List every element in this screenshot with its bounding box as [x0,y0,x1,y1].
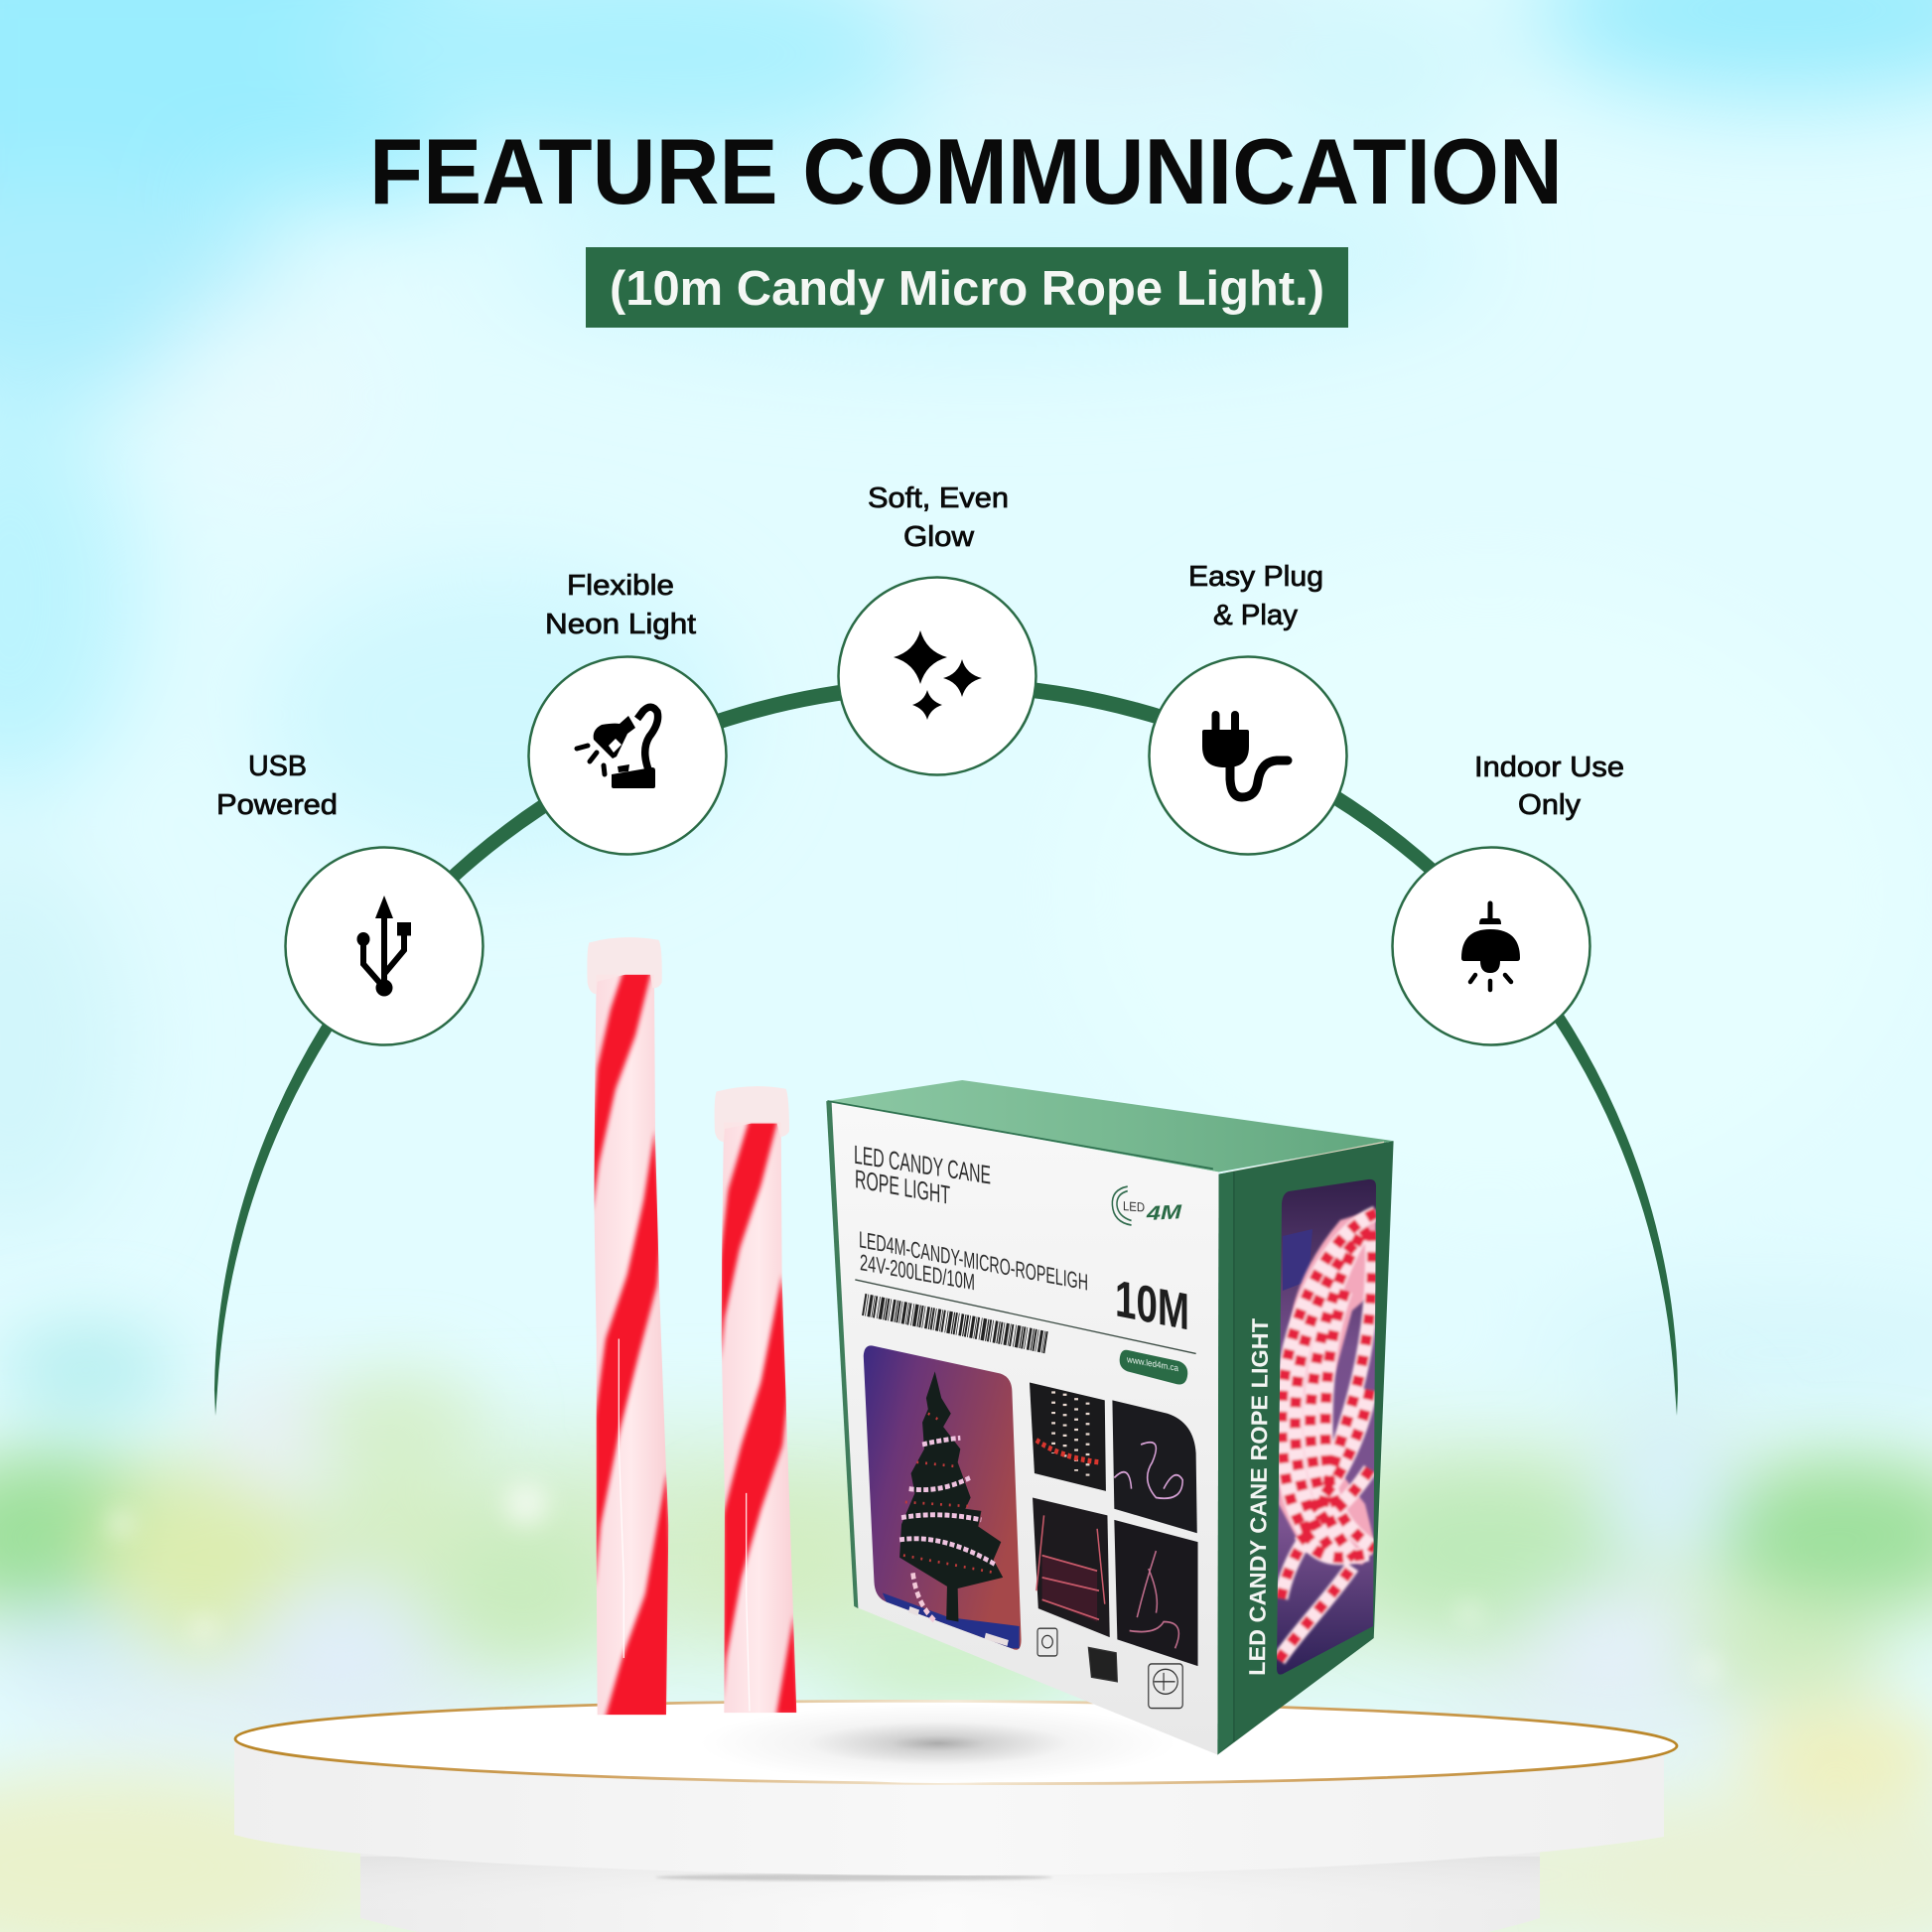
box top face [827,1080,1394,1172]
product box [826,1080,1394,1754]
label: & Play [1213,600,1298,631]
icon: desk lamp [577,707,658,788]
label [545,570,696,640]
label: Flexible [567,570,674,602]
box text: LED CANDY CANE ROPE LIGHT [1244,1318,1273,1676]
photo 3 [1033,1498,1110,1637]
feature: Soft, Even Glow [838,483,1036,774]
tree base stripe [883,1593,1020,1648]
platform [234,1698,1677,1932]
label: Soft, Even [868,483,1009,514]
subtitle banner [586,247,1348,328]
connecting arc [214,677,1678,1416]
box text [854,1140,1273,1676]
box text: ROPE LIGHT [855,1164,950,1210]
label [868,483,1009,553]
certification icons [1037,1628,1182,1709]
box top edge highlight [1226,1143,1384,1173]
coil base [1279,1209,1376,1565]
top shadow [700,1704,1176,1783]
label: Only [1518,789,1582,821]
box text: www.led4m.ca [1126,1354,1179,1373]
circle [286,848,483,1044]
feature: USB Powered [216,751,483,1044]
upper tier side [234,1737,1664,1875]
lower tier [360,1847,1540,1932]
label: Glow [903,521,975,553]
photo 4 [1114,1520,1198,1666]
short candy stick [715,1086,799,1717]
label: Neon Light [545,609,696,640]
photo 2 [1112,1400,1197,1533]
subtitle banner: (10m Candy Micro Rope Light.) [610,262,1324,316]
contact shadow [655,1874,1052,1880]
feature: Indoor Use Only [1392,752,1624,1044]
box text: 24V-200LED/10M [860,1249,975,1295]
divider line [855,1280,1196,1353]
box text: LED [1123,1198,1145,1215]
feature: Flexible Neon Light [528,570,727,854]
box text: LED CANDY CANE [854,1140,991,1190]
side window with rope coil [1277,1179,1376,1675]
barcode [864,1305,1046,1342]
icon: sparkles [894,630,982,720]
box front left edge [826,1101,858,1608]
box text: LED4M-CANDY-MICRO-ROPELIGH [859,1226,1088,1296]
circle [1392,848,1590,1044]
icon: usb [357,896,411,997]
icon: pendant lamp [1461,903,1520,990]
label: Easy Plug [1188,561,1323,593]
tall candy stick [587,937,670,1722]
tree photo [864,1345,1022,1650]
box front face [827,1101,1219,1754]
box text: 4M [1146,1201,1183,1225]
icon: plug [1202,711,1288,797]
tree [899,1371,1003,1622]
lower tier top shading [360,1857,1540,1916]
label: Powered [216,789,338,821]
box top edge line [827,1101,1213,1169]
label [216,751,338,821]
small photos [1030,1382,1198,1666]
box text: 10M [1115,1269,1189,1341]
label [1188,561,1323,631]
circle [838,578,1036,774]
circle [1150,657,1346,854]
brand logo swoosh [1112,1186,1132,1225]
website pill [1120,1350,1187,1385]
top surface [235,1698,1677,1787]
label: USB [248,751,307,782]
label: Indoor Use [1474,752,1624,783]
circle [528,657,727,854]
label [1474,752,1624,821]
photo 1 [1030,1382,1106,1491]
title: FEATURE COMMUNICATION [369,119,1563,223]
feature: Easy Plug & Play [1150,561,1346,854]
box side face [1217,1141,1394,1754]
blue packaging shape [1283,1229,1312,1291]
